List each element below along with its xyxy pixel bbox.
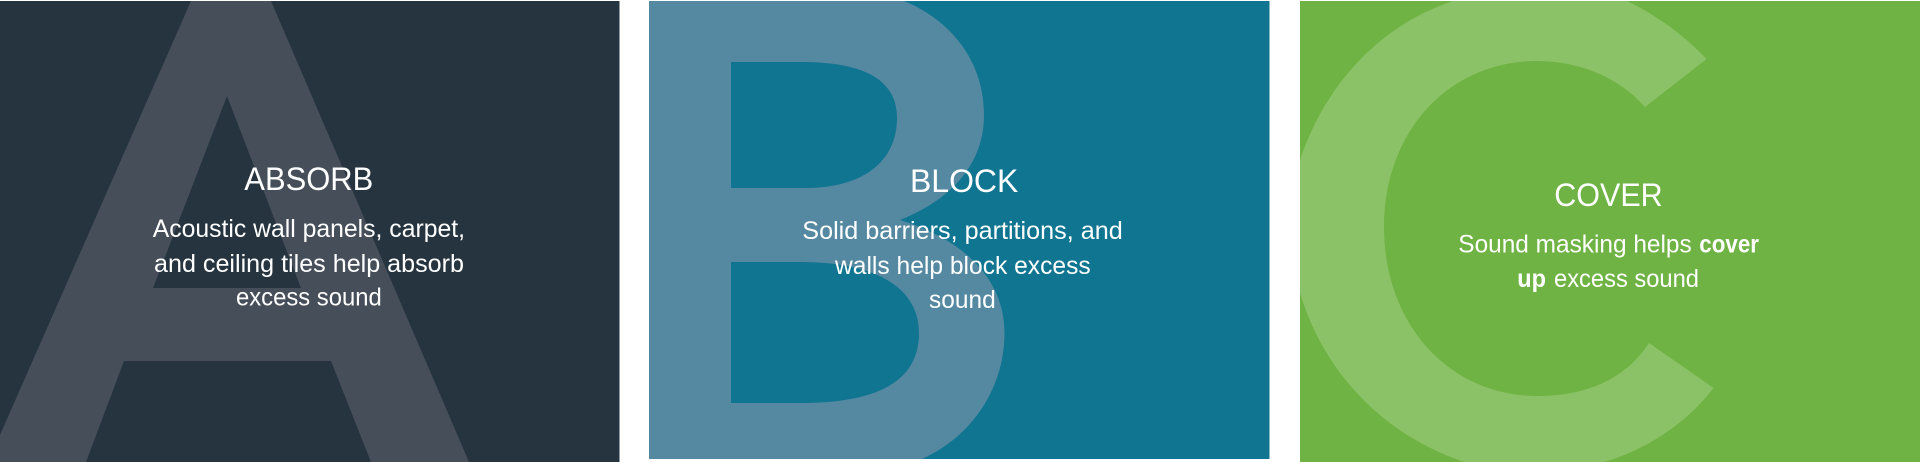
watermark letter A [0, 1, 469, 462]
panel: absorb [0, 1, 620, 462]
description: absorb: and ceiling tiles help absorb [154, 250, 464, 278]
panel background: block [649, 1, 1270, 459]
heading: ABSORB: ABSORB [244, 161, 373, 197]
heading: COVER: COVER [1554, 177, 1663, 213]
description: cover: excess sound [1554, 265, 1699, 293]
description: block: sound [929, 286, 996, 314]
watermark letter C [1300, 1, 1714, 462]
description: cover: cover [1699, 231, 1759, 259]
panel background: absorb [0, 1, 620, 462]
panel: block [649, 1, 1270, 459]
description: absorb: excess sound [236, 284, 382, 312]
watermark letter B [649, 1, 1004, 459]
description: cover [1458, 231, 1759, 293]
panel: cover [1300, 1, 1920, 462]
description: cover: Sound masking helps [1458, 231, 1692, 259]
description: block: walls help block excess [834, 252, 1091, 280]
panel background: cover [1300, 1, 1920, 462]
heading: BLOCK: BLOCK [910, 163, 1018, 199]
description: block [802, 217, 1123, 314]
description: cover: up [1517, 265, 1546, 293]
description: absorb [153, 215, 465, 312]
description: block: Solid barriers, partitions, and [802, 217, 1123, 245]
description: absorb: Acoustic wall panels, carpet, [153, 215, 465, 243]
